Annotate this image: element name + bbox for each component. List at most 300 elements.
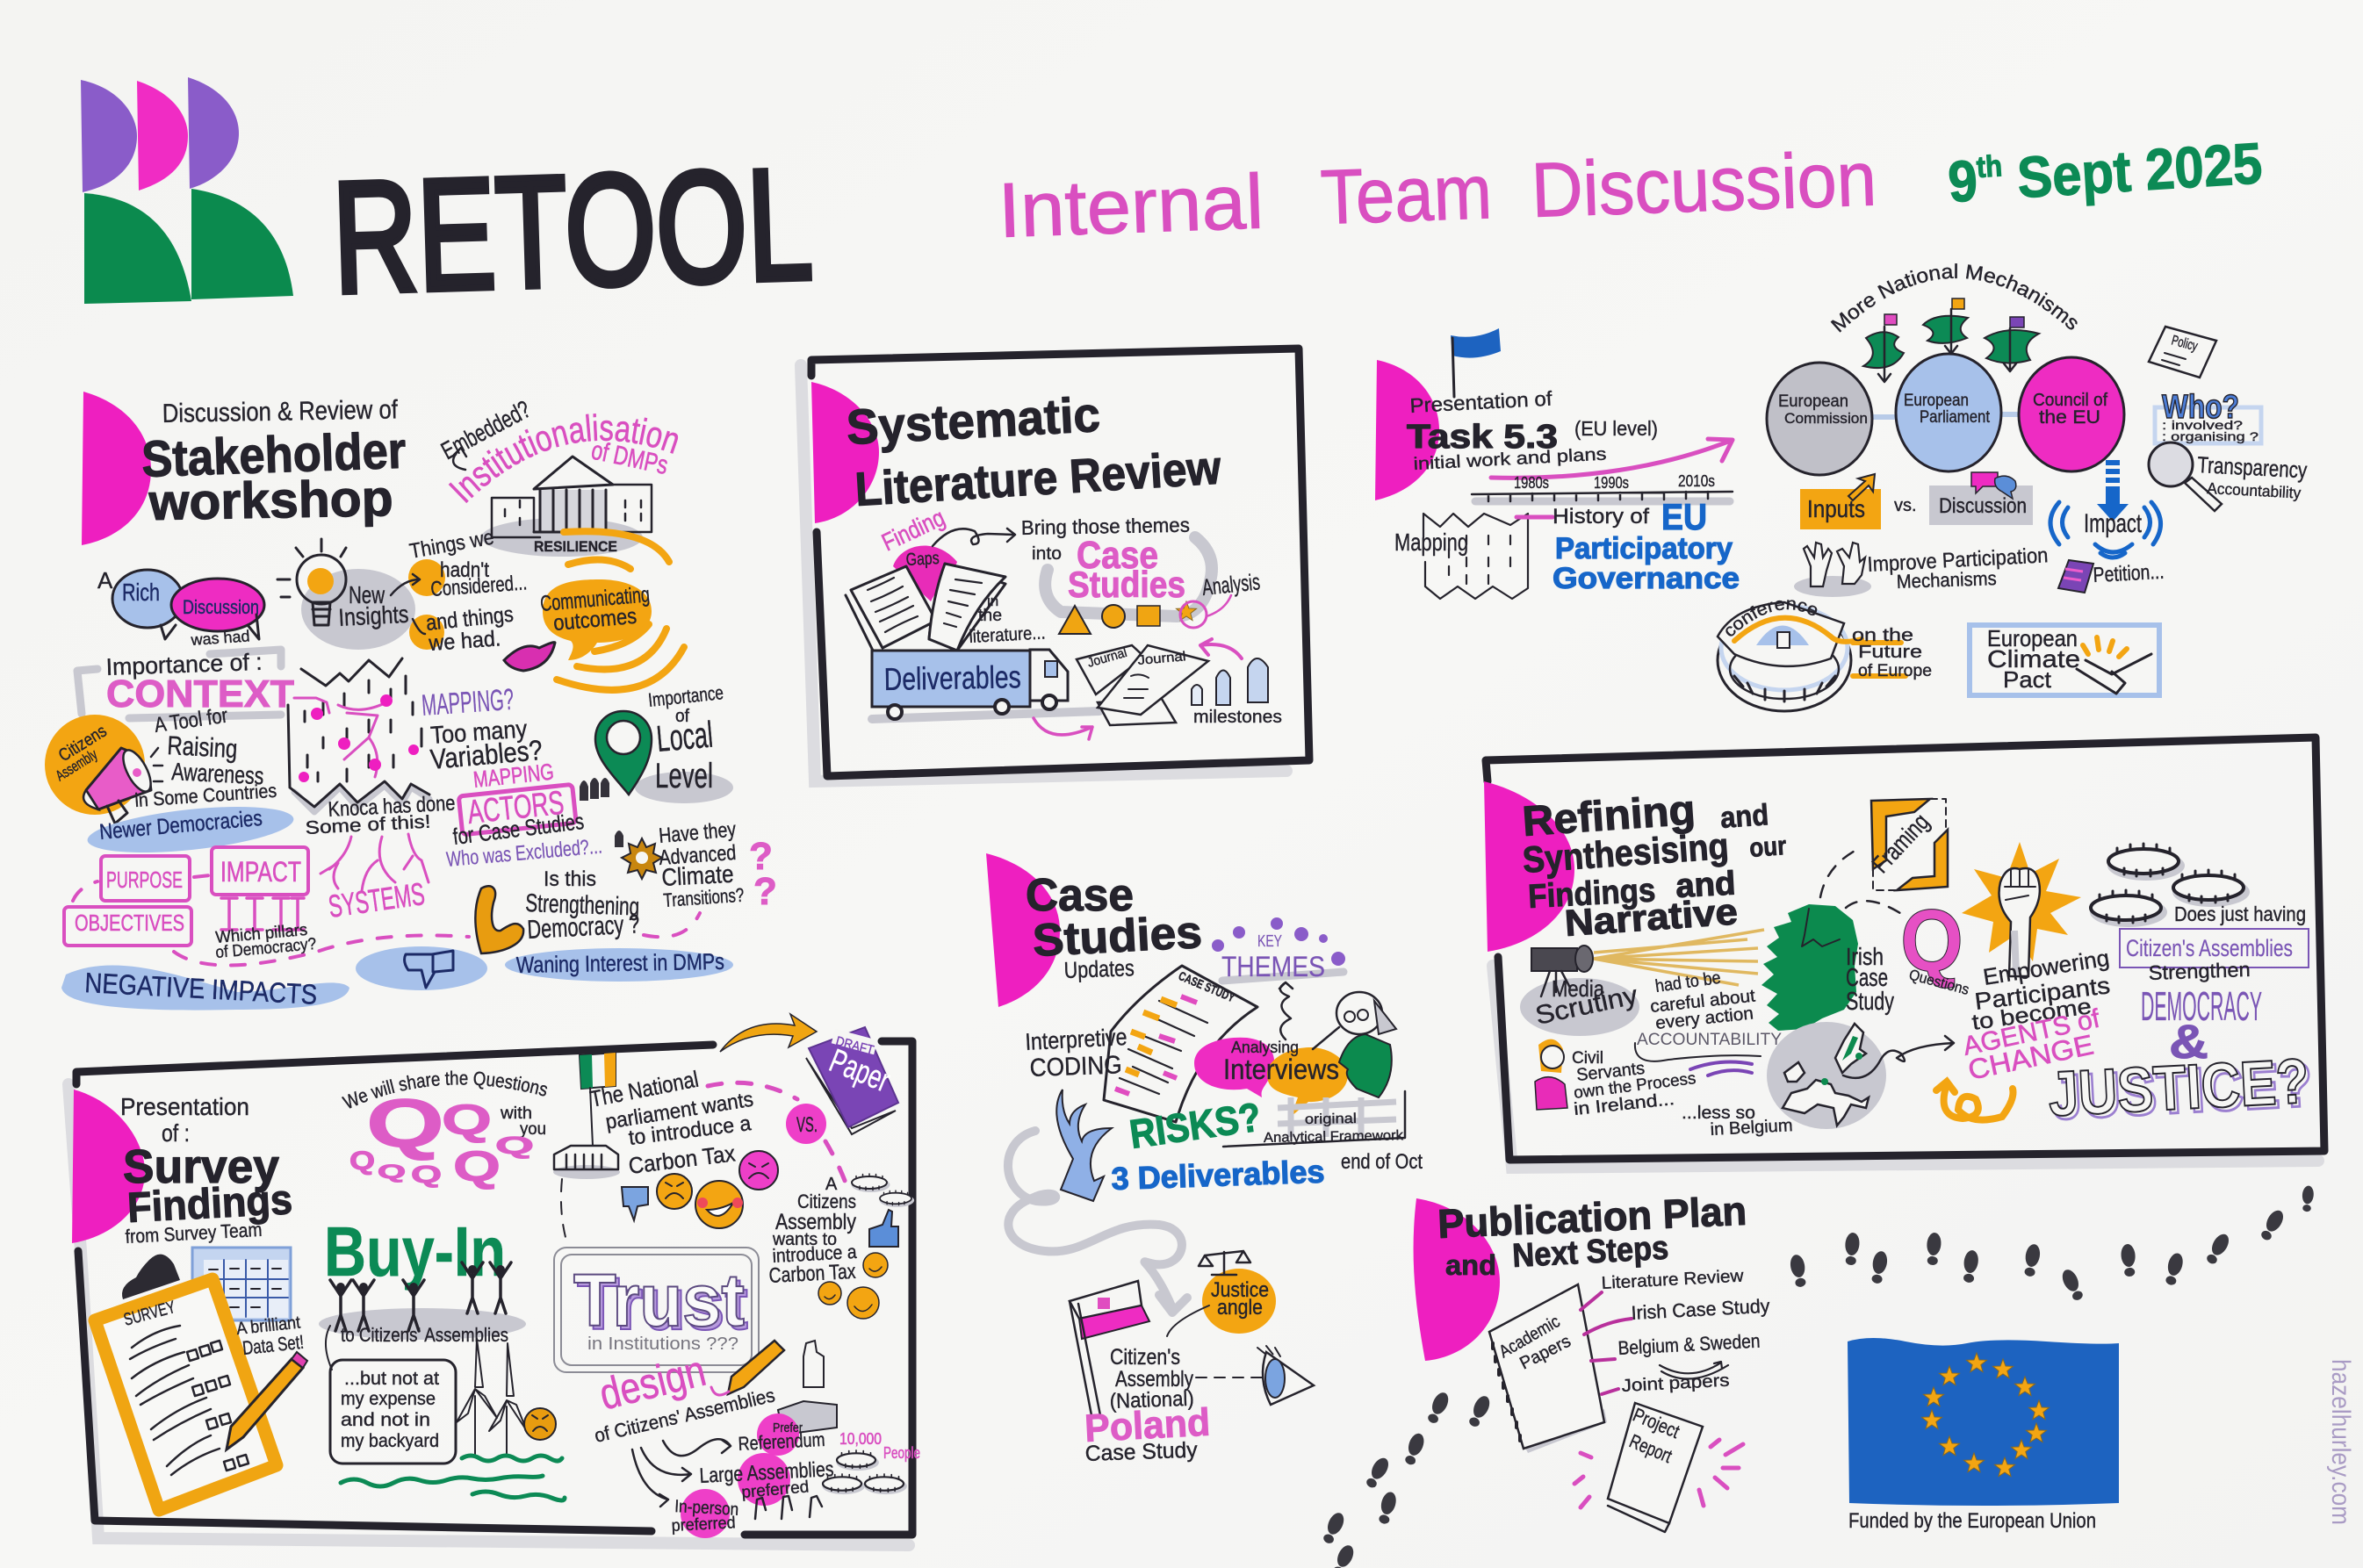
heading marker <box>1375 360 1439 500</box>
negative impacts blob: NEGATIVE IMPACTS <box>84 967 318 1011</box>
who involved organising: Who? <box>2162 389 2239 426</box>
systems branches and Knoca note <box>305 791 456 924</box>
flexed arm strengthening democracy: Democracy ? <box>527 910 640 945</box>
big Q questions: Q <box>1900 892 1963 990</box>
journals: Journal <box>1137 649 1186 668</box>
buy-in heading with figures: Buy-In <box>324 1212 506 1291</box>
citizen assemblies megaphone: Newer Democracies <box>98 806 263 845</box>
analysing interviews bubbles with person: Analysing <box>1231 1039 1299 1056</box>
draft paper book: DRAFT <box>834 1033 875 1058</box>
impact arrow and waves <box>2050 460 2161 557</box>
clipboard survey with pencil <box>95 1255 307 1510</box>
three deliverables arrow: 3 Deliverables <box>1111 1154 1325 1197</box>
European climate pact handshake: Pact <box>2003 666 2052 693</box>
justice angle with scales: angle <box>1217 1296 1263 1320</box>
heading text: Updates <box>1063 954 1135 983</box>
fist and starburst: CHANGE <box>1965 1028 2096 1086</box>
Poland flag and case study <box>1070 1281 1211 1466</box>
key themes <box>1212 917 1345 982</box>
impact arrow and waves: Impact <box>2084 509 2142 538</box>
things we hadn't considered notes: Things we <box>407 525 496 564</box>
eye <box>1196 1346 1314 1405</box>
deliverables truck <box>872 650 1099 739</box>
academic papers notebook: Papers <box>1516 1332 1574 1373</box>
purpose, impact, objectives boxes: Which pillars <box>215 921 308 947</box>
heading text: (EU level) <box>1574 417 1658 440</box>
folded map with pins: MAPPING? <box>421 683 515 723</box>
EU institutions circles: Commission <box>1784 410 1868 427</box>
media scrutiny camera: Media <box>1552 975 1604 1002</box>
EU institutions circles: Parliament <box>1920 408 1991 427</box>
citizen assemblies megaphone: in Some Countries <box>134 780 277 811</box>
mapping actors box: MAPPING <box>472 759 555 793</box>
purpose, impact, objectives boxes <box>64 847 317 962</box>
clipboard survey with pencil: Data Set! <box>241 1331 305 1359</box>
fist and starburst: AGENTS of <box>1961 1004 2103 1061</box>
conference on the future of Europe: on the <box>1852 626 1913 645</box>
timeline: 1990s <box>1594 474 1629 492</box>
institutionalisation with building: Embedded? <box>436 395 535 464</box>
timeline: 2010s <box>1678 472 1715 490</box>
Irish parliament with carbon tax note: to introduce a <box>627 1111 753 1150</box>
draft paper book: Paper <box>825 1042 895 1100</box>
heading text: and <box>1445 1249 1496 1281</box>
citizens assembly note with faces: wants to <box>772 1230 837 1249</box>
heading text: Discussion & Review of <box>162 395 399 428</box>
deliverables truck: Deliverables <box>883 658 1021 697</box>
list of publications: Belgium & Sweden <box>1617 1330 1761 1359</box>
rich discussion bubbles: A <box>97 567 113 593</box>
importance of context: Importance of : <box>105 649 263 680</box>
versus dashes <box>708 1082 848 1190</box>
heading text: Refining <box>1521 787 1697 845</box>
list of publications: Joint papers <box>1621 1371 1730 1396</box>
mapping fold and history of EU participatory governance: History of <box>1553 505 1649 529</box>
questions cluster: with <box>500 1104 532 1123</box>
media scrutiny camera: ACCOUNTABILITY <box>1637 1031 1782 1049</box>
date: Sept 2025 <box>2001 130 2264 211</box>
heading text: Findings <box>126 1176 293 1232</box>
risks and framework <box>1127 1091 1405 1157</box>
systems branches and Knoca note: SYSTEMS <box>326 875 427 924</box>
mapping actors box <box>445 759 623 872</box>
media scrutiny camera: careful about <box>1649 987 1756 1017</box>
artist credit: hazelhurley.com <box>2326 1359 2355 1525</box>
finding gaps in the literature book <box>846 504 1046 659</box>
heading text <box>1026 870 1203 983</box>
conference on the future of Europe: Future <box>1858 643 1922 662</box>
media scrutiny camera: every action <box>1654 1003 1754 1033</box>
heading text: Narrative <box>1563 890 1739 944</box>
key themes: THEMES <box>1221 951 1325 982</box>
citizen assemblies megaphone: Assembly <box>53 746 101 784</box>
key themes: KEY <box>1257 932 1282 950</box>
Poland flag and case study: Assembly <box>1115 1367 1193 1392</box>
climate transitions note: Transitions? <box>663 884 745 911</box>
heading text: and <box>1675 865 1736 905</box>
design of citizens' assemblies: preferred <box>741 1478 810 1502</box>
inputs vs discussion: Inputs <box>1807 495 1865 522</box>
map of Ireland and Irish case study: Case <box>1846 964 1888 992</box>
list of publications: Irish Case Study <box>1631 1295 1770 1324</box>
map of Ireland and Irish case study: Study <box>1846 988 1894 1016</box>
fist and starburst: to become <box>1970 994 2093 1035</box>
citizen assemblies megaphone: A Tool for <box>153 704 229 737</box>
heading text: Studies <box>1032 907 1203 967</box>
Irish parliament with carbon tax note: The National <box>587 1066 701 1112</box>
EU institutions circles <box>1767 354 2124 475</box>
finding gaps in the literature book: literature... <box>969 622 1046 647</box>
European climate pact handshake: European <box>1987 625 2078 651</box>
date: th <box>1976 149 2003 184</box>
EU flag <box>1848 1338 2119 1506</box>
finding gaps in the literature book: Gaps <box>905 549 940 570</box>
importance of context <box>77 649 294 718</box>
strengthen democracy and justice: & <box>2169 1016 2208 1068</box>
civil servants figure: Civil <box>1572 1049 1603 1068</box>
wind turbines and grass <box>341 1339 565 1500</box>
citizens assembly note with faces <box>768 1174 914 1319</box>
design of citizens' assemblies: of Citizens' Assemblies <box>593 1384 777 1447</box>
systems branches and Knoca note: Some of this! <box>305 812 431 838</box>
project report with rays <box>1574 1403 1743 1532</box>
title: Internal Team Discussion: Team <box>1319 147 1494 241</box>
importance of local level pin: of <box>675 707 689 726</box>
mapping actors box: ACTORS <box>466 785 566 831</box>
funding caption: Funded by the European Union <box>1848 1509 2096 1533</box>
frame <box>801 349 1309 781</box>
heading text: Next Steps <box>1511 1230 1669 1275</box>
panel: Systematic Literature Review <box>801 349 1309 781</box>
clipboard survey with pencil: A brilliant <box>235 1313 302 1339</box>
things we hadn't considered notes: hadn't <box>440 558 489 582</box>
heading marker <box>811 382 879 523</box>
heading text: Findings <box>1527 872 1656 916</box>
title: Internal Team Discussion: Discussion <box>1530 134 1877 234</box>
design of citizens' assemblies: Prefer <box>773 1421 803 1435</box>
draft paper book <box>806 1027 898 1134</box>
mapping actors box: Who was Excluded?... <box>445 835 603 872</box>
mapping fold and history of EU participatory governance: EU <box>1661 496 1707 537</box>
title: Internal Team Discussion <box>997 134 1877 254</box>
case study paper <box>1025 966 1257 1122</box>
clipboard survey with pencil: SURVEY <box>122 1298 177 1330</box>
framing picture frame <box>1820 799 1948 915</box>
big Q questions: Questions <box>1907 967 1970 998</box>
title: Internal Team Discussion: Internal <box>997 158 1264 254</box>
design of citizens' assemblies: Large Assemblies <box>699 1457 834 1488</box>
heading marker <box>82 392 151 545</box>
framing picture frame: Framing <box>1867 808 1934 878</box>
Irish parliament with carbon tax note: Carbon Tax <box>627 1140 737 1179</box>
heading text: from Survey Team <box>125 1219 263 1248</box>
header: logo and title <box>81 77 2264 327</box>
magnifier transparency: Transparency <box>2197 451 2308 484</box>
heading text: Synthesising <box>1521 825 1730 881</box>
heading text: of : <box>162 1119 190 1147</box>
list of publications <box>1581 1267 1770 1396</box>
risks and framework: original <box>1305 1111 1357 1127</box>
pink growth arrow <box>1491 439 1733 478</box>
citizens' assemblies rings: Does just having <box>2174 903 2306 925</box>
importance of local level pin <box>595 681 733 803</box>
mapping fold and history of EU participatory governance <box>1394 496 1740 599</box>
milestones bars: milestones <box>1193 708 1282 727</box>
fist and starburst: Participants <box>1973 972 2112 1015</box>
purpose, impact, objectives boxes: OBJECTIVES <box>75 910 184 936</box>
heading text <box>845 386 1223 516</box>
design of citizens' assemblies <box>593 1341 920 1538</box>
European climate pact handshake: Climate <box>1987 645 2080 673</box>
things we hadn't considered notes: Considered... <box>430 571 528 601</box>
things we hadn't considered notes: we had. <box>428 626 501 656</box>
icon: Retool logo mark <box>81 77 293 304</box>
rich discussion bubbles: was had <box>190 627 250 649</box>
institutionalisation with building: Institutionalisation <box>448 414 678 504</box>
questions cluster: Q <box>378 1161 406 1183</box>
finding gaps in the literature book: in <box>987 593 998 609</box>
who involved organising <box>2155 389 2261 443</box>
petition clipboard: Petition... <box>2093 560 2165 587</box>
institutionalisation with building <box>436 395 678 565</box>
heading text: our <box>1748 831 1788 863</box>
speech bubble not at my expense: and not in <box>341 1410 430 1430</box>
questions cluster: Q <box>411 1161 442 1188</box>
EU institutions circles: European <box>1778 392 1848 411</box>
citizens assembly note with faces: Citizens <box>797 1190 856 1212</box>
heading marker <box>72 1090 145 1243</box>
design of citizens' assemblies: Referendum <box>738 1428 825 1455</box>
design of citizens' assemblies: preferred <box>671 1514 736 1536</box>
questions cluster: Q <box>349 1147 375 1176</box>
heading text <box>140 395 407 531</box>
bring themes into case studies: Bring those themes <box>1021 514 1190 539</box>
footprints trail <box>1321 1185 2315 1568</box>
climate transitions note: ? <box>753 870 777 913</box>
questions cluster: Q <box>442 1097 492 1144</box>
who involved organising: : organising ? <box>2162 429 2259 443</box>
timeline: 1980s <box>1514 474 1549 492</box>
academic papers notebook: Academic <box>1496 1312 1563 1362</box>
case study paper: CODING <box>1029 1051 1122 1082</box>
improve participation hands: Mechanisms <box>1896 567 1997 593</box>
civil servants figure <box>1535 1039 1793 1140</box>
citizens assembly note with faces: Carbon Tax <box>768 1260 856 1288</box>
case study paper: CASE STUDY <box>1177 968 1237 1005</box>
things we hadn't considered notes <box>391 525 528 656</box>
bring themes into case studies <box>1021 514 1212 616</box>
strengthen democracy and justice <box>2047 929 2314 1133</box>
importance of local level pin: Local <box>655 714 715 759</box>
design of citizens' assemblies: design <box>594 1346 710 1420</box>
climate transitions note: Climate <box>661 860 734 891</box>
questions cluster <box>341 1070 548 1190</box>
heading text: Survey <box>123 1140 279 1193</box>
citizens assembly note with faces: A <box>825 1175 838 1194</box>
three deliverables arrow <box>1056 1090 1423 1201</box>
institutionalisation with building: of DMPs <box>589 436 670 480</box>
Irish parliament with carbon tax note: parliament wants <box>604 1088 755 1134</box>
strengthen democracy and justice: Strengthen <box>2148 958 2251 984</box>
importance of context: CONTEXT <box>106 673 294 716</box>
rich discussion bubbles: Discussion <box>183 596 259 618</box>
communicating outcomes bubble: Communicating <box>539 582 651 616</box>
communicating outcomes bubble: outcomes <box>552 604 638 636</box>
trust in institutions box: Trust <box>573 1259 745 1341</box>
citizen assemblies megaphone <box>45 704 296 860</box>
flexed arm strengthening democracy: Strengthening <box>525 889 640 922</box>
trust in institutions box <box>554 1179 759 1372</box>
EU institutions circles: Council of <box>2033 391 2107 410</box>
new insights light bulb: New <box>349 581 385 608</box>
heading marker <box>986 853 1060 1007</box>
folded map with pins <box>288 658 544 812</box>
logo wordmark RETOOL: RETOOL <box>330 136 815 327</box>
new insights light bulb: Insights <box>338 601 409 631</box>
map of Ireland and Irish case study: Irish <box>1846 943 1884 970</box>
justice angle with scales: Justice <box>1211 1278 1269 1302</box>
heading text: Publication Plan <box>1437 1188 1747 1247</box>
case study paper: Interpretive <box>1025 1024 1127 1055</box>
buy-in heading with figures <box>319 1212 526 1346</box>
strengthen democracy and justice: Citizen's Assemblies <box>2126 935 2293 961</box>
civil servants figure: ...less so <box>1682 1104 1755 1123</box>
citizen assemblies megaphone: Awareness <box>171 758 264 789</box>
mapping actors box: for Case Studies <box>451 808 586 850</box>
design of citizens' assemblies: People <box>883 1444 920 1462</box>
conference on the future of Europe: conference <box>1725 600 1818 637</box>
speech bubble not at my expense <box>326 1326 456 1464</box>
citizen assemblies megaphone: Raising <box>167 731 238 764</box>
rich discussion bubbles <box>97 567 264 649</box>
data table <box>192 1248 291 1320</box>
heading text: Case <box>1026 870 1134 921</box>
folded map with pins: Too many <box>429 715 528 749</box>
analysing interviews bubbles with person <box>1194 982 1396 1117</box>
speech bubble not at my expense: my expense <box>341 1389 436 1409</box>
heading text: Stakeholder <box>140 422 407 488</box>
European climate pact handshake <box>1970 625 2159 695</box>
map of Ireland and Irish case study <box>1761 904 1894 1031</box>
analysis shapes <box>1059 568 1261 634</box>
climate transitions note: Advanced <box>659 841 737 870</box>
purpose, impact, objectives boxes: PURPOSE <box>106 867 183 893</box>
mapping fold and history of EU participatory governance: Governance <box>1553 562 1740 595</box>
heading text: and <box>1719 798 1769 835</box>
institutionalisation with building: RESILIENCE <box>534 538 617 555</box>
questions cluster: We will share the Questions <box>341 1070 548 1109</box>
versus dashes: VS. <box>796 1113 818 1137</box>
heading text: Task 5.3 <box>1407 419 1558 456</box>
speech bubble not at my expense: ...but not at <box>344 1369 439 1389</box>
fist and starburst: Empowering <box>1981 945 2111 990</box>
orange arrow <box>720 1014 817 1052</box>
trust in institutions box: in Institutions ??? <box>587 1334 738 1354</box>
panel: Stakeholder Workshop <box>45 392 794 1037</box>
milestones bars <box>1192 639 1282 727</box>
questions cluster: Q <box>453 1144 501 1190</box>
heading text <box>120 1093 293 1248</box>
things we hadn't considered notes: and things <box>425 602 515 636</box>
mapping fold and history of EU participatory governance: Participatory <box>1555 532 1733 565</box>
civil servants figure: Servants <box>1575 1059 1646 1085</box>
grey squiggle arrow <box>1008 1131 1187 1313</box>
importance of local level pin: Importance <box>647 681 724 711</box>
list of publications: Literature Review <box>1601 1267 1745 1293</box>
Poland flag and case study: (National) <box>1109 1387 1194 1413</box>
Poland flag and case study: Citizen's <box>1110 1345 1180 1370</box>
analysis shapes: Analysis <box>1200 568 1261 601</box>
purpose, impact, objectives boxes: of Democracy? <box>215 935 317 962</box>
new insights light bulb <box>277 539 415 650</box>
design of citizens' assemblies: In-person <box>674 1497 739 1520</box>
inputs vs discussion: Discussion <box>1939 494 2027 518</box>
angry and laughing faces <box>622 1151 778 1228</box>
petition clipboard <box>2058 560 2165 593</box>
magnifier transparency: Accountability <box>2207 479 2302 502</box>
flexed arm strengthening democracy <box>475 867 640 953</box>
panel: Survey Findings <box>62 1012 920 1551</box>
systems branches and Knoca note: Knoca has done <box>328 791 456 822</box>
heading text: workshop <box>148 470 393 531</box>
EU institutions circles: European <box>1904 392 1969 410</box>
panel: Refining and Synthesising <box>1484 737 2324 1168</box>
questions cluster: you <box>520 1120 546 1139</box>
risks and framework: Analytical Framework <box>1264 1128 1404 1146</box>
policy document: Policy <box>2170 333 2199 355</box>
dashed connecting line <box>73 875 700 966</box>
citizens assembly note with faces: Assembly <box>775 1210 856 1234</box>
citizen assemblies megaphone: Citizens <box>55 722 111 766</box>
bring themes into case studies: Case <box>1077 534 1158 577</box>
risks and framework: RISKS? <box>1127 1094 1264 1157</box>
fist and starburst <box>1936 842 2112 1120</box>
conference on the future of Europe <box>1716 600 1932 713</box>
project report with rays: Report <box>1626 1430 1675 1467</box>
policy document <box>2149 327 2216 378</box>
mapping fold and history of EU participatory governance: Mapping <box>1394 529 1468 556</box>
civil servants figure: in Ireland... <box>1573 1090 1675 1119</box>
civil servants figure: own the Process <box>1573 1069 1697 1103</box>
heading text: Presentation of <box>1409 387 1553 417</box>
inputs vs discussion: vs. <box>1894 496 1917 515</box>
bring themes into case studies: Studies <box>1068 564 1185 605</box>
EU institutions circles: the EU <box>2039 407 2100 428</box>
citizens' assemblies rings <box>2090 844 2306 927</box>
date: 9 <box>1946 147 1983 214</box>
heading text <box>1407 387 1658 474</box>
journals <box>1077 645 1208 725</box>
magnifier transparency <box>2149 442 2308 511</box>
conference on the future of Europe: of Europe <box>1858 662 1932 680</box>
folded map with pins: Variables? <box>429 734 544 775</box>
design of citizens' assemblies: 10,000 <box>839 1430 882 1448</box>
heading text: Literature Review <box>854 442 1223 516</box>
heading text: Systematic <box>845 386 1101 455</box>
three deliverables arrow: end of Oct <box>1341 1150 1423 1174</box>
Poland flag and case study: Case Study <box>1084 1438 1199 1466</box>
media scrutiny camera <box>1520 930 1782 1075</box>
heading text <box>1437 1188 1747 1281</box>
frame <box>1486 737 2324 1168</box>
project report with rays: Project <box>1630 1404 1682 1442</box>
inputs vs discussion <box>1800 472 2033 529</box>
questions cluster: Q <box>495 1132 534 1159</box>
justice angle with scales <box>1167 1251 1276 1336</box>
heading text <box>1521 787 1788 944</box>
more national mechanisms arc: More National Mechanisms <box>1830 263 2078 333</box>
panel: Task 5.3 EU level <box>1375 263 2308 713</box>
